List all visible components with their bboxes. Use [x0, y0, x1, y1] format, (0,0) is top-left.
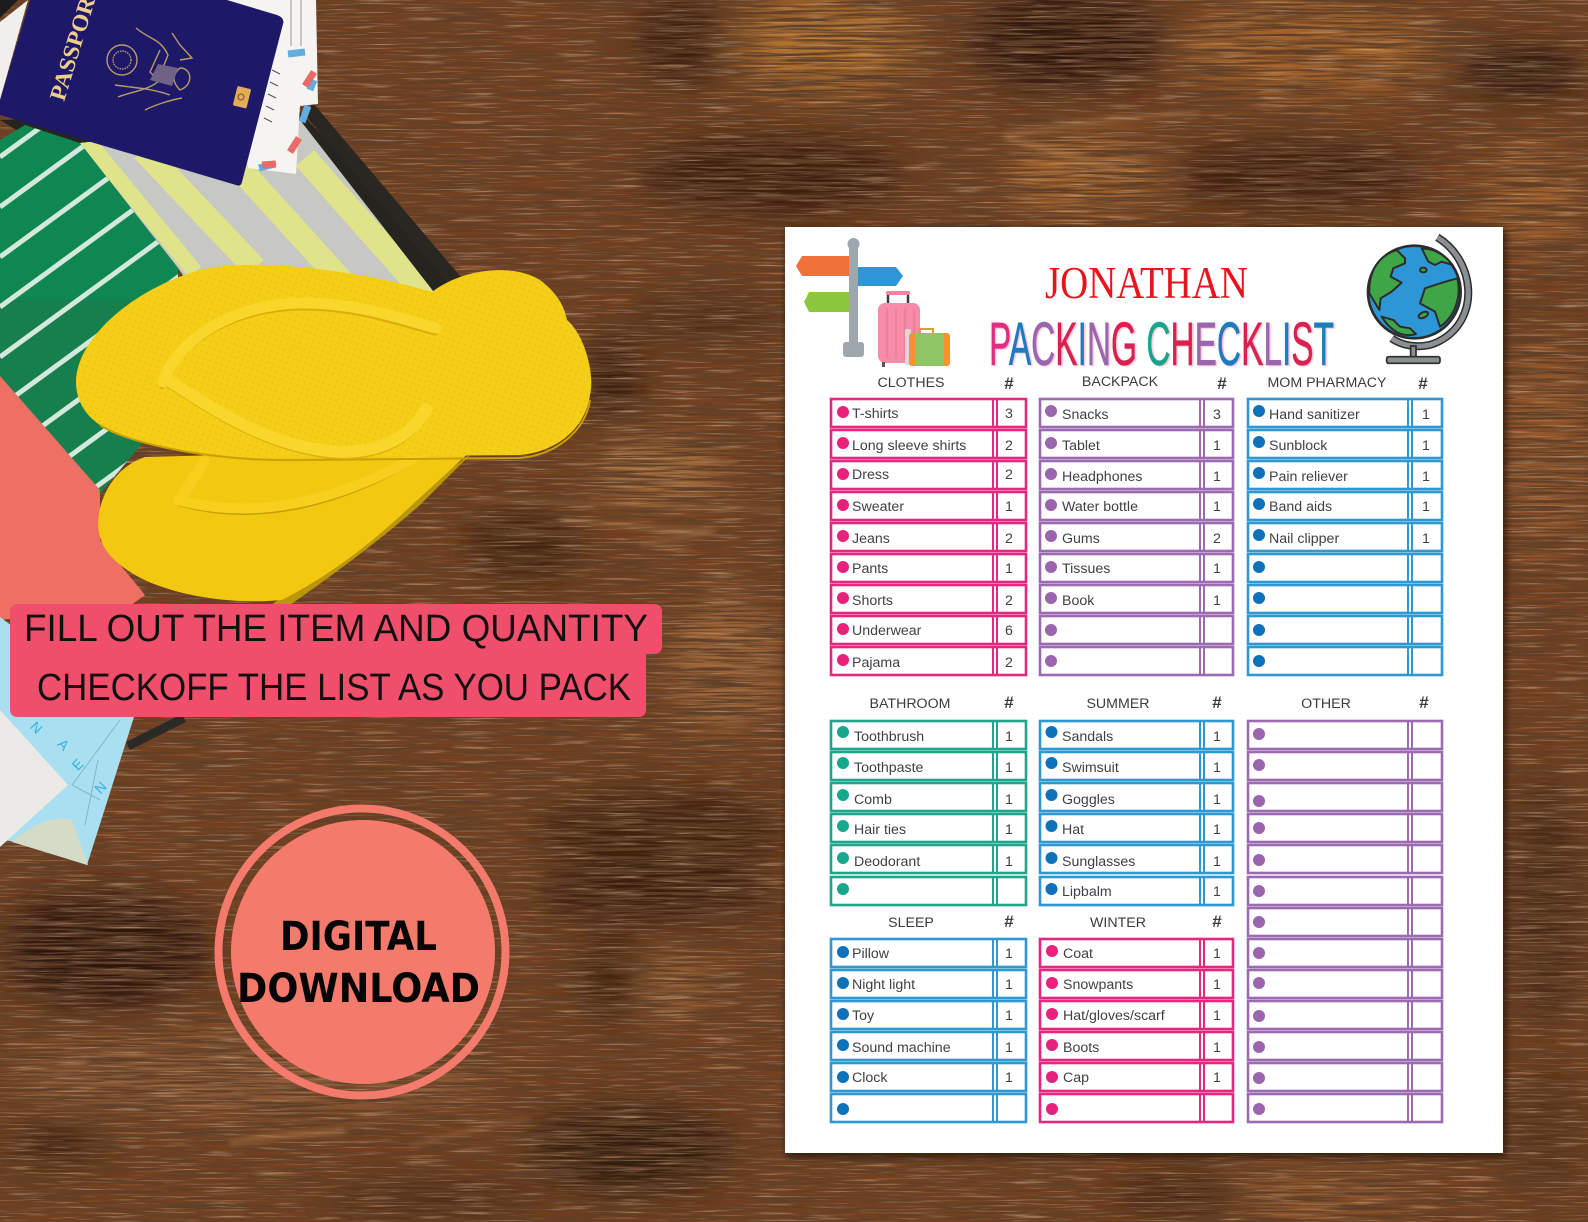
row: empty [1248, 1032, 1442, 1060]
row: sound machine [831, 1032, 1026, 1060]
row: lipbalm [1040, 877, 1233, 905]
row: book: 1 [1213, 593, 1221, 609]
row: empty [1248, 616, 1442, 644]
row: lipbalm: 1 [1213, 884, 1221, 900]
icon: globe [1368, 237, 1468, 363]
row: empty [1248, 845, 1442, 873]
row: sunglasses: Sunglasses [1062, 854, 1135, 870]
row: toothpaste: Toothpaste [854, 760, 924, 776]
row: hat gloves scarf: Hat/gloves/scarf [1063, 1008, 1165, 1024]
row: snowpants: 1 [1213, 977, 1221, 993]
row: toy [831, 1001, 1026, 1029]
row: empty [1040, 616, 1233, 644]
heading: quantity: # [1217, 374, 1227, 393]
row: boots [1040, 1032, 1233, 1060]
title: packing checklist: PACKING CHECKLIST [989, 310, 1334, 378]
row: clock [831, 1063, 1026, 1091]
passport [0, 0, 283, 186]
row: shorts [831, 585, 1026, 613]
row: tissues [1040, 554, 1233, 582]
row: long sleeve shirts [831, 430, 1026, 458]
badge: digital download [218, 808, 506, 1096]
heading: bathroom: BATHROOM [870, 696, 950, 712]
row: pain reliever [1248, 461, 1442, 489]
panel: other [1248, 693, 1442, 1122]
row: sound machine: Sound machine [852, 1040, 951, 1056]
row: tablet: Tablet [1062, 438, 1100, 454]
row: empty [1248, 1094, 1442, 1122]
row: coat: 1 [1213, 946, 1221, 962]
row: hair ties: Hair ties [854, 822, 906, 838]
row: hat: Hat [1062, 822, 1084, 838]
row: snowpants: Snowpants [1063, 977, 1133, 993]
row: pants: Pants [852, 561, 888, 577]
row: empty [1248, 1001, 1442, 1029]
row: water bottle: 1 [1213, 499, 1221, 515]
panel: summer [1040, 693, 1233, 905]
row: sunblock: Sunblock [1269, 438, 1328, 454]
callout: instructions [10, 604, 662, 717]
row: sweater: Sweater [852, 499, 904, 515]
row: hat gloves scarf: 1 [1213, 1008, 1221, 1024]
panel: bathroom [831, 693, 1026, 905]
map lettering: N [91, 778, 110, 797]
row: night light: Night light [852, 977, 915, 993]
row: t-shirts: 3 [1005, 406, 1013, 422]
row: cap: 1 [1213, 1070, 1221, 1086]
row: gums [1040, 523, 1233, 551]
row: book [1040, 585, 1233, 613]
panel: backpack [1040, 374, 1233, 675]
icon: signpost [796, 238, 903, 357]
row: pillow: 1 [1005, 946, 1013, 962]
heading: quantity: # [1004, 693, 1014, 712]
map lettering: A [55, 736, 73, 754]
row: snacks: Snacks [1062, 407, 1109, 423]
row: toy: Toy [852, 1008, 875, 1024]
badge line 2: DOWNLOAD [237, 966, 480, 1012]
row: empty [831, 877, 1026, 905]
row: empty [1248, 585, 1442, 613]
row: empty [1248, 721, 1442, 749]
row: book: Book [1062, 593, 1095, 609]
row: toothbrush [831, 721, 1026, 749]
row: pain reliever: 1 [1422, 469, 1430, 485]
row: empty [1248, 554, 1442, 582]
row: hand sanitizer: Hand sanitizer [1269, 407, 1360, 423]
row: shorts: Shorts [852, 593, 893, 609]
eagle emblem [107, 28, 192, 110]
row: tablet: 1 [1213, 438, 1221, 454]
row: empty [831, 1094, 1026, 1122]
row: boots: 1 [1213, 1040, 1221, 1056]
heading: backpack: BACKPACK [1082, 374, 1159, 390]
row: deodorant: Deodorant [854, 854, 920, 870]
row: toothpaste: 1 [1005, 760, 1013, 776]
row: hat [1040, 814, 1233, 842]
row: sweater [831, 492, 1026, 520]
row: goggles [1040, 783, 1233, 811]
row: hat: 1 [1213, 822, 1221, 838]
row: lipbalm: Lipbalm [1062, 884, 1112, 900]
row: sunglasses: 1 [1213, 854, 1221, 870]
row: t-shirts: T-shirts [852, 406, 899, 422]
row: empty [1248, 752, 1442, 780]
row: sandals: Sandals [1062, 729, 1113, 745]
row: pillow [831, 939, 1026, 967]
passport chip [233, 86, 251, 109]
row: headphones: 1 [1213, 469, 1221, 485]
heading: quantity: # [1004, 912, 1014, 931]
row: cap [1040, 1063, 1233, 1091]
row: toothbrush: Toothbrush [854, 729, 924, 745]
row: headphones [1040, 461, 1233, 489]
row: t-shirts [831, 399, 1026, 427]
row: empty [1040, 1094, 1233, 1122]
suitcase dark frame [0, 112, 458, 305]
heading: mom pharmacy: MOM PHARMACY [1267, 375, 1387, 391]
row: hand sanitizer [1248, 399, 1442, 427]
row: long sleeve shirts: Long sleeve shirts [852, 438, 966, 454]
row: hat gloves scarf [1040, 1001, 1233, 1029]
row: water bottle: Water bottle [1062, 499, 1138, 515]
row: boots: Boots [1063, 1040, 1099, 1056]
callout line 2: CHECKOFF THE LIST AS YOU PACK [37, 667, 631, 709]
row: snacks [1040, 399, 1233, 427]
row: snacks: 3 [1213, 407, 1221, 423]
row: night light: 1 [1005, 977, 1013, 993]
row: dress [831, 461, 1026, 489]
row: swimsuit: 1 [1213, 760, 1221, 776]
heading: quantity: # [1212, 912, 1222, 931]
badge line 1: DIGITAL [280, 914, 437, 960]
photo: open suitcase with clothes, passport and flip flops [0, 0, 591, 865]
row: sandals [1040, 721, 1233, 749]
row: gums: 2 [1213, 531, 1221, 547]
row: pajama [831, 647, 1026, 675]
row: tissues: Tissues [1062, 561, 1110, 577]
row: tissues: 1 [1213, 561, 1221, 577]
row: toothpaste [831, 752, 1026, 780]
coral shirt [0, 376, 145, 620]
row: sunblock [1248, 430, 1442, 458]
row: snowpants [1040, 970, 1233, 998]
row: pajama: Pajama [852, 655, 900, 671]
row: long sleeve shirts: 2 [1005, 438, 1013, 454]
row: sunglasses [1040, 845, 1233, 873]
lower yellow flip flop [98, 446, 473, 606]
row: sound machine: 1 [1005, 1040, 1013, 1056]
heading: quantity: # [1004, 374, 1014, 393]
row: clock: Clock [852, 1070, 888, 1086]
row: empty [1248, 970, 1442, 998]
row: empty [1248, 814, 1442, 842]
row: deodorant: 1 [1005, 854, 1013, 870]
row: empty [1248, 939, 1442, 967]
row: cap: Cap [1063, 1070, 1089, 1086]
row: empty [1248, 1063, 1442, 1091]
row: nail clipper [1248, 523, 1442, 551]
map lettering: E [69, 756, 86, 773]
grey and yellow striped shirt [80, 120, 440, 305]
row: empty [1248, 783, 1442, 811]
row: goggles: 1 [1213, 792, 1221, 808]
map [0, 617, 134, 865]
row: pants [831, 554, 1026, 582]
row: underwear: Underwear [852, 623, 922, 639]
row: gums: Gums [1062, 531, 1100, 547]
row: nail clipper: Nail clipper [1269, 531, 1339, 547]
heading: winter: WINTER [1090, 915, 1146, 931]
row: coat [1040, 939, 1233, 967]
title: name: JONATHAN [1045, 258, 1248, 308]
row: swimsuit: Swimsuit [1062, 760, 1119, 776]
row: empty [1040, 647, 1233, 675]
heading: quantity: # [1418, 374, 1428, 393]
heading: clothes: CLOTHES [877, 375, 945, 391]
row: band aids [1248, 492, 1442, 520]
icon: suitcases [878, 291, 950, 367]
row: night light [831, 970, 1026, 998]
row: dress: Dress [852, 467, 889, 483]
row: pajama: 2 [1005, 655, 1013, 671]
map lettering: N [27, 718, 46, 737]
row: toy: 1 [1005, 1008, 1013, 1024]
row: comb: 1 [1005, 792, 1013, 808]
heading: quantity: # [1419, 693, 1429, 712]
heading: summer: SUMMER [1086, 696, 1150, 712]
row: nail clipper: 1 [1422, 531, 1430, 547]
row: empty [1248, 908, 1442, 936]
green striped shirt [0, 125, 178, 494]
panel: sleep [831, 912, 1026, 1122]
row: underwear: 6 [1005, 623, 1013, 639]
map lettering [27, 718, 110, 797]
row: coat: Coat [1063, 946, 1093, 962]
row: headphones: Headphones [1062, 469, 1142, 485]
row: shorts: 2 [1005, 593, 1013, 609]
row: comb [831, 783, 1026, 811]
envelope [225, 0, 318, 174]
row: empty [1248, 877, 1442, 905]
row: clock: 1 [1005, 1070, 1013, 1086]
row: pillow: Pillow [852, 946, 890, 962]
row: hair ties: 1 [1005, 822, 1013, 838]
panel: winter [1040, 912, 1233, 1122]
row: hair ties [831, 814, 1026, 842]
white folded paper [0, 710, 68, 847]
row: pants: 1 [1005, 561, 1013, 577]
row: jeans [831, 523, 1026, 551]
row: comb: Comb [854, 792, 892, 808]
row: goggles: Goggles [1062, 792, 1115, 808]
heading: quantity: # [1212, 693, 1222, 712]
row: jeans: Jeans [852, 531, 890, 547]
row: deodorant [831, 845, 1026, 873]
panel: clothes [831, 374, 1026, 675]
row: water bottle [1040, 492, 1233, 520]
row: swimsuit [1040, 752, 1233, 780]
row: toothbrush: 1 [1005, 729, 1013, 745]
row: sweater: 1 [1005, 499, 1013, 515]
upper yellow flip flop [76, 265, 591, 460]
white item at top corner [0, 0, 28, 100]
callout line 1: FILL OUT THE ITEM AND QUANTITY [24, 608, 648, 650]
row: band aids: Band aids [1269, 499, 1332, 515]
row: sunblock: 1 [1422, 438, 1430, 454]
heading: other: OTHER [1301, 696, 1351, 712]
row: underwear [831, 616, 1026, 644]
row: pain reliever: Pain reliever [1269, 469, 1348, 485]
row: empty [1248, 647, 1442, 675]
row: band aids: 1 [1422, 499, 1430, 515]
row: jeans: 2 [1005, 531, 1013, 547]
row: dress: 2 [1005, 467, 1013, 483]
checklist paper [785, 227, 1503, 1153]
panel: mom pharmacy [1248, 374, 1442, 675]
heading: sleep: SLEEP [888, 915, 934, 931]
row: hand sanitizer: 1 [1422, 407, 1430, 423]
row: sandals: 1 [1213, 729, 1221, 745]
row: tablet [1040, 430, 1233, 458]
